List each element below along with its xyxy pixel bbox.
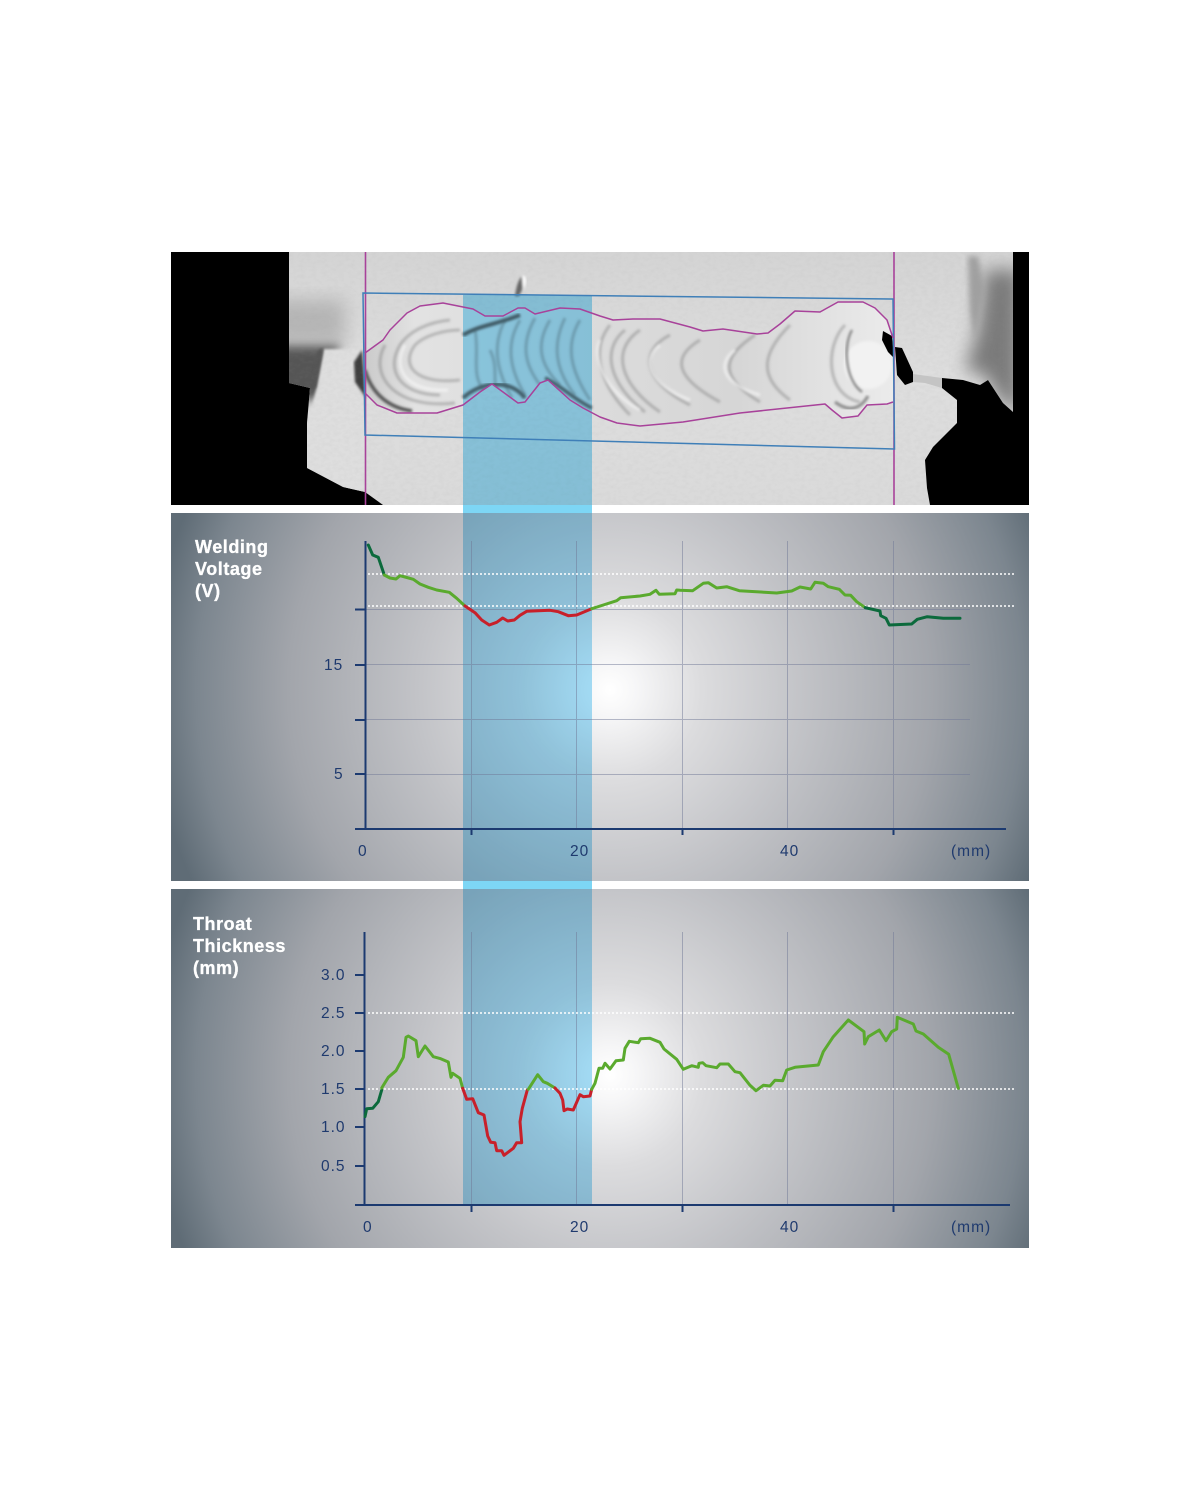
axis labels: 0.5 (321, 1158, 346, 1175)
heading: Thickness (193, 936, 286, 956)
panel: throat thickness (171, 889, 1029, 1248)
axis labels: (mm) (951, 843, 991, 860)
heading: (V) (195, 581, 221, 601)
heading: Welding (195, 537, 269, 557)
thresholds (368, 1013, 1016, 1089)
axis labels: 2.0 (321, 1043, 346, 1060)
blue highlight on scan (463, 295, 592, 505)
axis labels: 40 (780, 843, 799, 860)
axis labels: 5 (334, 766, 344, 783)
axis labels: 40 (780, 1219, 799, 1236)
blue highlight band (463, 889, 592, 1205)
spatter spike (515, 276, 526, 296)
magenta section lines (366, 252, 894, 505)
thresholds (368, 574, 1016, 606)
grid (472, 932, 894, 1205)
blue measuring box (363, 293, 894, 449)
axis labels: 2.5 (321, 1005, 346, 1022)
heading: Voltage (195, 559, 263, 579)
axis labels: 0 (358, 843, 368, 860)
panel: weld surface scan (171, 252, 1029, 505)
heading: Throat (193, 914, 252, 934)
axis labels: 0 (363, 1219, 373, 1236)
blue band connectors (463, 505, 592, 889)
plate surface (289, 252, 1013, 505)
axis labels (324, 657, 991, 860)
shadowed ridges (365, 370, 412, 411)
end crater (844, 342, 884, 388)
weld bead (366, 302, 893, 417)
axis labels: 20 (570, 843, 589, 860)
thickness curve (365, 1017, 958, 1155)
voltage curve (368, 545, 960, 625)
axis labels: 1.5 (321, 1081, 346, 1098)
shading on plate (270, 252, 1020, 505)
panel: welding voltage (171, 513, 1029, 881)
axis labels: 3.0 (321, 967, 346, 984)
blue highlight band (463, 513, 592, 881)
axis labels: (mm) (951, 1219, 991, 1236)
grid (366, 541, 970, 829)
axes (355, 541, 1006, 835)
axis labels: 15 (324, 657, 343, 674)
axis labels: 20 (570, 1219, 589, 1236)
black voids at weld end (882, 331, 913, 385)
axes (355, 932, 1010, 1212)
weld outline (365, 302, 893, 426)
axis labels (321, 967, 991, 1236)
axis labels: 1.0 (321, 1119, 346, 1136)
heading: (mm) (193, 958, 239, 978)
